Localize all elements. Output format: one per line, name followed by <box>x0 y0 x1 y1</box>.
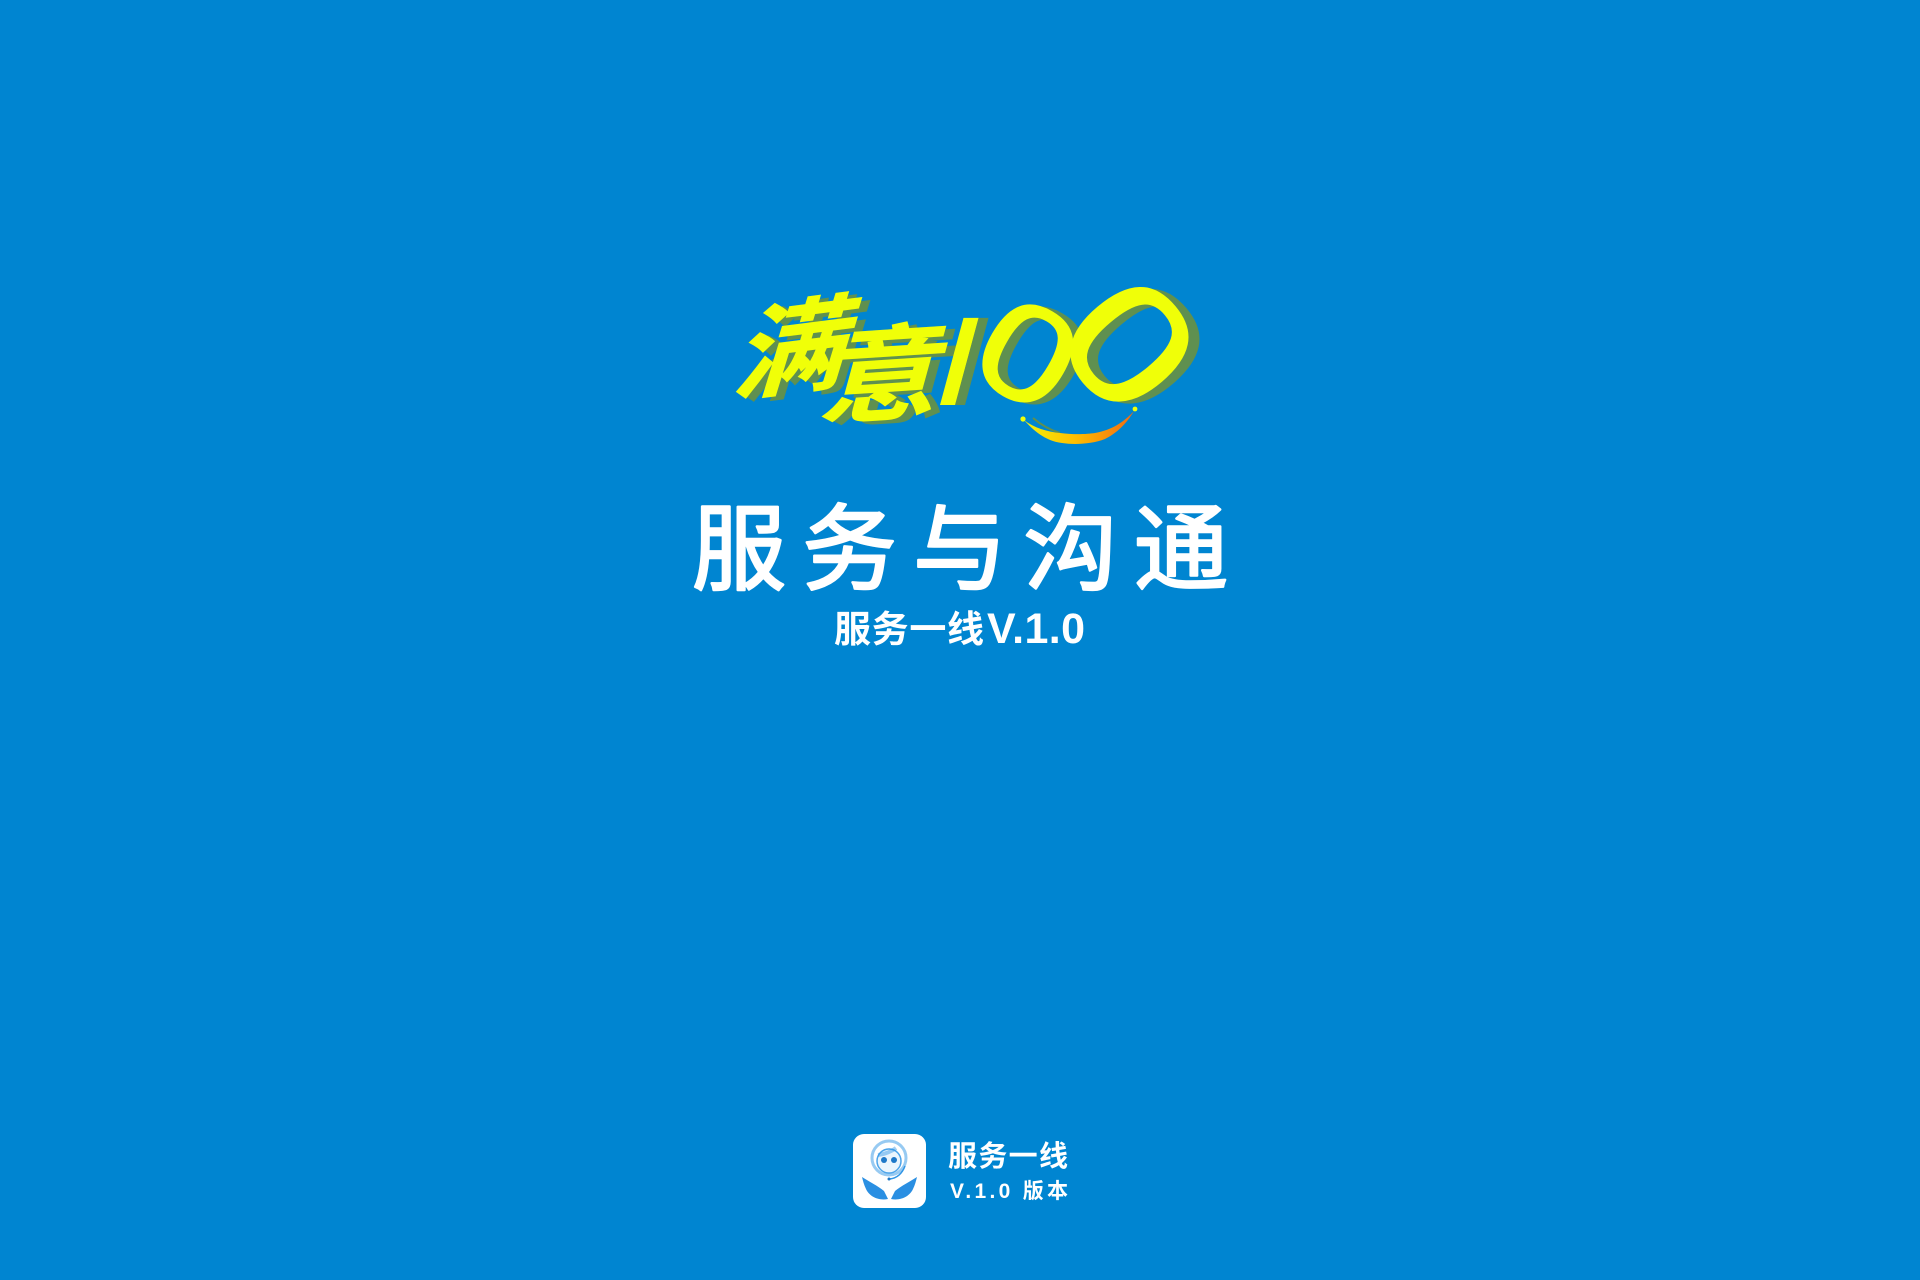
icon: caring hands <box>862 1177 917 1199</box>
logo: 满意100 <box>736 287 1200 444</box>
footer badge <box>853 1134 1068 1208</box>
logo smile <box>1020 407 1137 444</box>
subtitle <box>834 605 1085 653</box>
footer version: V.1.0 版本 <box>950 1180 1068 1203</box>
icon: headset head <box>872 1141 906 1179</box>
logo yellow layer: 0 <box>1022 242 1237 448</box>
logo yellow layer: 0 <box>949 266 1105 443</box>
logo yellow layer <box>736 287 1188 422</box>
app icon <box>853 1134 926 1208</box>
icon: face <box>877 1148 901 1172</box>
footer name: 服务一线 <box>948 1140 1068 1173</box>
logo yellow layer: 意 <box>810 287 970 446</box>
subtitle chinese: 服务一线 <box>834 609 984 650</box>
logo shadow layer: 0 <box>1033 244 1248 450</box>
icon: eyes <box>881 1157 897 1180</box>
logo yellow layer: 1 <box>901 292 1009 433</box>
logo yellow layer: 满 <box>721 257 879 424</box>
logo shadow layer: 0 <box>959 268 1115 445</box>
logo shadow layer: 意 <box>819 290 979 449</box>
logo shadow layer: 满 <box>729 260 887 427</box>
title: 服务与沟通 <box>692 474 1228 610</box>
logo shadow layer: 1 <box>911 292 1019 433</box>
subtitle version: V.1.0 <box>987 605 1085 653</box>
logo shadow layer <box>747 289 1200 426</box>
